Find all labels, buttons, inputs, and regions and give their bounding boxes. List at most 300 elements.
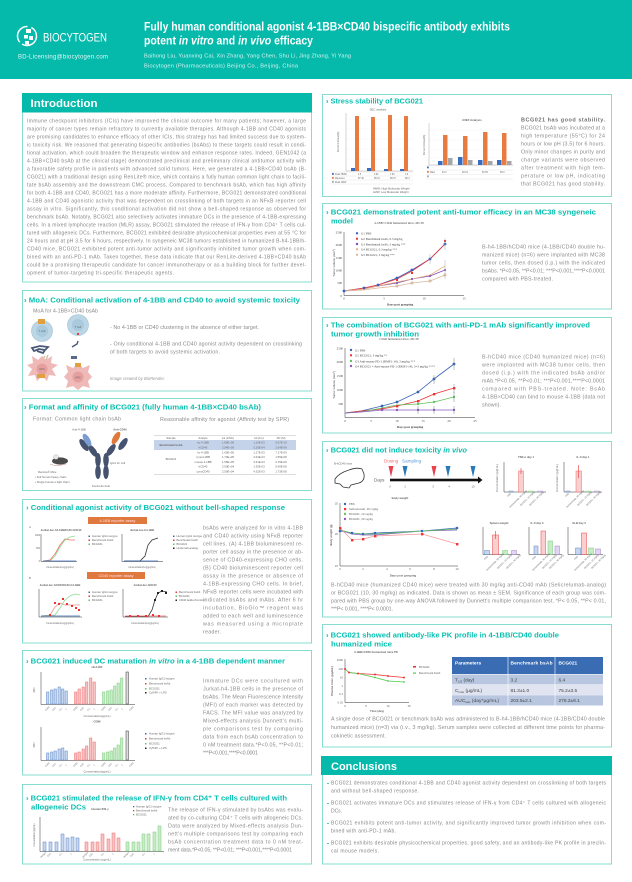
illustration: T cell and APC crosslinking: T cell bbox=[39, 329, 46, 333]
reporter assay description: porter cell assay in the presence or ab- bbox=[203, 550, 303, 556]
line chart: PK: 0 bbox=[344, 704, 346, 708]
reporter assay description: 4-1BB-expressing CHO cells. In brief, bbox=[203, 582, 303, 588]
bar chart: HLA-DR: 1 bbox=[65, 708, 68, 711]
authors and affiliation bbox=[144, 54, 351, 70]
stability description: that BCG021 has good stability. bbox=[521, 182, 605, 188]
line chart: combination tumor volume: 500 bbox=[338, 402, 343, 406]
conclusion bullets: BCG021 activates immature DCs and stimulates release of IFN-γ from CD4⁺ T cells cultured with allogeneic bbox=[331, 801, 606, 807]
chart: CD40 reporter with 4-1BB CHO: Jurkat-luc-hCD40/CHO-h4-1BB bbox=[40, 583, 80, 587]
table: PK parameters: (µg/mL) bbox=[464, 688, 482, 694]
table: affinity by SPR: 5.40E-08 bbox=[275, 464, 287, 468]
line chart: body weight: Selicrelumab, 30 mg/kg bbox=[349, 507, 379, 511]
heading: Introduction: Introduction bbox=[30, 98, 98, 110]
bar chart: CD86: 0.1 bbox=[115, 764, 119, 768]
diagram: antibody format: Anti-4-1BB bbox=[72, 428, 86, 432]
diagram: antibody format bbox=[72, 428, 129, 488]
table: affinity by SPR: Analyte bbox=[198, 436, 208, 440]
table: PK parameters: C bbox=[455, 689, 458, 694]
line chart: MC38 tumor volume: Tumor volume (mm³) bbox=[332, 249, 336, 277]
reporter assay description: reader. bbox=[203, 630, 221, 636]
bar chart: SEC analysis: 98.4 bbox=[405, 178, 410, 180]
bar chart: spleen weight: Spleen weight bbox=[490, 521, 508, 525]
bar chart: SEC analysis: 1.93 bbox=[390, 174, 395, 176]
label: CD40 reporter assay: CD40 reporter assay bbox=[98, 574, 134, 578]
bar chart: HLA-DR: BCG021 bbox=[149, 686, 160, 690]
bar chart: IL-6 day 1: IL-6 day 1 bbox=[577, 455, 590, 459]
table: affinity by SPR: cynoCD40 bbox=[196, 470, 210, 474]
line chart: PK: 5 bbox=[365, 704, 367, 708]
conclusion bullets: BCG021 exhibits potent anti-tumor activity, and significantly improved tumor growth inhibition when com- bbox=[331, 821, 606, 827]
heading: PK profile: humanized mice bbox=[331, 640, 392, 648]
illustration: T cell and APC crosslinking: APC bbox=[75, 376, 81, 380]
line chart: PK: Benchmark bsAb bbox=[419, 671, 441, 675]
bar chart: TNF-α day 1: Concentration (pg/mL) bbox=[495, 464, 499, 492]
combination description bbox=[482, 355, 606, 409]
table: PK parameters: BCG021 bbox=[558, 660, 577, 666]
reporter assay description: (B) CD40 bioluminescent reporter cell bbox=[203, 566, 303, 572]
line chart: body weight: 8 bbox=[433, 567, 435, 571]
bar chart: spleen weight: BCG021, 10 mg/kg bbox=[497, 554, 513, 570]
heading: MoA: › MoA: Conditional activation of 4-1BB and CD40 to avoid systemic toxicity bbox=[24, 296, 301, 305]
combination description: dosed (i.p.) with the indicated bsAb and/or bbox=[482, 371, 605, 377]
bar chart: IL-6 day 1: Concentration (pg/mL) bbox=[555, 464, 559, 492]
panel: introduction bbox=[22, 93, 312, 282]
bar chart: ALB day 3: Selicrelumab, 30 mg/kg bbox=[574, 552, 593, 572]
chart: 4-1BB reporter with CD40 CHO bbox=[35, 528, 118, 569]
chart: CD40 reporter alone: Concentration(Log)(µg/mL) bbox=[131, 622, 159, 625]
bar chart: human IFN-γ: Benchmark bsAb bbox=[136, 808, 158, 812]
bar chart: CD86: 0.1 bbox=[59, 764, 63, 768]
table: affinity by SPR: ka (1/Ms) bbox=[222, 436, 234, 440]
bar chart: CD86: 1 bbox=[121, 764, 124, 767]
illustration: T cell and APC crosslinking: APC bbox=[39, 367, 45, 371]
chart: CD40 reporter alone bbox=[123, 583, 205, 625]
DC maturation description: ***P<0.001,****P<0.0001 bbox=[203, 751, 258, 757]
heading: IFN-γ release: › BCG021 stimulated the release of IFN-γ from CD4⁺ T cells cultured with bbox=[26, 794, 287, 802]
table: affinity by SPR: BCG021 bbox=[166, 457, 177, 461]
bar chart: human IFN-γ: 0.01 bbox=[89, 853, 94, 858]
conclusion bullets: BCG021 exhibits desirable physicochemical properties, good safety, and an antibody-like PK profile in preclin- bbox=[331, 841, 606, 847]
conclusion bullets: and without bell-shaped response. bbox=[331, 789, 419, 795]
dosing schedule diagram: 0 bbox=[389, 484, 391, 488]
bar chart: human IFN-γ: 0.1 bbox=[142, 853, 146, 857]
introduction body text: assay in vitro. Significantly, this conditional activation did not show a bell-shaped response as observed for bbox=[27, 207, 306, 213]
line chart: combination tumor volume: 2000 bbox=[337, 360, 343, 364]
label: 4-1BB reporter assay: 4-1BB reporter assay bbox=[100, 519, 136, 523]
bar chart: CD86: BCG021 bbox=[149, 742, 160, 746]
authors and affiliation: Baihong Liu, Yuanxing Cai, Xin Zhang, Yang Chen, Shu Li, Jing Zhang, Yi Yang bbox=[144, 54, 351, 60]
bar chart: SEC analysis: 98.07 bbox=[390, 178, 396, 180]
DC maturation description: data from each bsAb concentration to bbox=[203, 735, 303, 741]
line chart: combination tumor volume: G2 BCG021, 3 mg/kg ** bbox=[355, 354, 388, 358]
line chart: MC38 tumor volume: G5 BCG021, 3 mg/kg *** bbox=[361, 253, 395, 258]
line chart: MC38 tumor volume: G1 PBS bbox=[361, 232, 372, 236]
panel: conditional agonist activity: A bbox=[29, 525, 31, 529]
chart: 4-1BB reporter with CD40 CHO: Benchmark bsAb bbox=[92, 538, 114, 542]
IFN-γ description: nett's multiple comparisons test by comparing each bbox=[168, 832, 303, 838]
table: affinity by SPR: 5.67E-10 bbox=[275, 440, 287, 444]
table: affinity by SPR: 5.20E-04 bbox=[253, 446, 265, 450]
table: affinity by SPR: hu 4-1BB bbox=[197, 450, 209, 454]
bar chart: iCIEF analysis: 54.3 bbox=[442, 172, 447, 174]
line chart: MC38 tumor volume: 5 bbox=[383, 296, 385, 300]
table: affinity by SPR: 1.10E-03 bbox=[253, 440, 265, 444]
poster title: Fully human conditional agonist 4-1BB×CD40 bispecific antibody exhibits bbox=[144, 20, 510, 34]
bar chart: CD86 bbox=[32, 720, 175, 774]
anti-tumor description: compared with PBS-treated. bbox=[482, 277, 553, 283]
dosing schedule diagram: Dosing bbox=[384, 458, 399, 464]
chart: CD40 reporter alone: Benchmark bsAb bbox=[179, 590, 201, 594]
anti-tumor description: bsAbs. *P<0.05, **P<0.01; ***P<0.001,****P<0.0001 bbox=[482, 269, 605, 275]
toxicity description: pared with PBS group by one-way ANOVA followed by Dunnett's multiple comparison test. *P< 0.05, **P< 0.01, bbox=[331, 599, 606, 605]
line chart: combination tumor volume: G3 Anti-mouse PD-1 (RMP1-14), 3 mg/kg *** bbox=[355, 359, 416, 364]
stability description bbox=[521, 118, 605, 188]
table: affinity by SPR: 1.73E-08 bbox=[275, 470, 287, 474]
bar chart: HLA-DR: 1 bbox=[121, 708, 124, 711]
table: affinity by SPR: 1.80E+06 bbox=[222, 440, 234, 444]
line chart: body weight: 6 bbox=[409, 567, 411, 571]
bar chart: SEC analysis: 95.61 bbox=[374, 178, 380, 180]
panel: conditional agonist activity bbox=[22, 500, 312, 643]
table: PK parameters: Parameters bbox=[455, 660, 481, 666]
table: affinity by SPR: Benchmark bsAb bbox=[159, 443, 183, 447]
bar chart: HLA-DR: Concentration(µg/mL) bbox=[83, 714, 111, 718]
dosing schedule diagram: 1 bbox=[404, 484, 406, 488]
bar chart: CD86: 0.01 bbox=[80, 763, 85, 768]
line chart: combination tumor volume: Days post grouping bbox=[397, 425, 424, 429]
reporter assay description: and CD40 activity using NFκB reporter bbox=[203, 534, 303, 540]
toxicity description: B-hCD40 mice (humanized CD40 mice) were treated with 30 mg/kg anti-CD40 mAb (Selicrelumab-analog) bbox=[331, 583, 606, 589]
DC maturation description: Immature DCs were cocultured with bbox=[203, 679, 303, 685]
panel: DC maturation bbox=[22, 650, 312, 775]
bar chart: TNF-α day 1 bbox=[495, 455, 546, 509]
bar chart: SEC analysis: 1.6 bbox=[405, 174, 409, 176]
bar chart: HLA-DR: 0.001 bbox=[45, 706, 51, 712]
introduction body text: 4-1BB×CD40 bsAb at the clinical stage) demonstrated preclinical and preliminary clinical antitumor activity with bbox=[27, 159, 306, 165]
chart: 4-1BB reporter with CD40 CHO: BCG021 bbox=[92, 542, 103, 546]
reporter assay description: sence of CD40-expressing CHO cells. bbox=[203, 558, 303, 564]
heading: anti-tumor efficacy: model bbox=[331, 216, 353, 226]
chart: CD40 reporter with 4-1BB CHO: BCG021 bbox=[92, 598, 103, 602]
authors and affiliation: Biocytogen (Pharmaceuticals) Beijing Co., Beijing, China bbox=[144, 64, 299, 70]
stability description: perature or low pH, indicating bbox=[521, 174, 605, 180]
line chart: body weight: Body weight bbox=[392, 496, 408, 500]
line chart: PK: 0.01 bbox=[338, 700, 343, 704]
chart: 4-1BB reporter with CD40 CHO: 1000 bbox=[35, 535, 41, 537]
icon: RenLite mouse bbox=[35, 455, 70, 484]
dosing schedule diagram: 3 bbox=[432, 484, 434, 488]
chart: 4-1BB reporter alone: Human IgG1 isotype bbox=[176, 534, 202, 538]
chart: 4-1BB reporter with CD40 CHO: Human IgG1 isotype bbox=[92, 534, 118, 538]
DC maturation description: Mixed-effects analysis Dunnett's multi- bbox=[203, 719, 303, 725]
bar chart: spleen weight: PBS bbox=[484, 556, 489, 561]
bar chart: TNF-α day 1: BCG021, 30 mg/kg bbox=[529, 491, 545, 507]
introduction body text: 4-1BB and CD40 agonistic activity that was dependent on crosslinking of both targets in an NFκB reporter cell bbox=[27, 199, 306, 205]
bar chart: human IFN-γ: Isotype bbox=[40, 851, 47, 859]
bar chart: IL-6 day 1 bbox=[555, 455, 602, 509]
subheading: format: Format: Common light chain bsAb bbox=[33, 416, 121, 422]
dosing schedule diagram bbox=[334, 458, 482, 488]
dosing schedule diagram: Sampling bbox=[402, 458, 422, 464]
DC maturation description: FACS. The MFI value was analyzed by bbox=[203, 711, 303, 717]
PK description: cokinetic assessment. bbox=[331, 734, 386, 740]
line chart: body weight: Body weight (g) bbox=[329, 524, 333, 545]
toxicity description: or BCG021 (10, 30 mg/kg) as indicated. Data is shown as mean ± SEM. Significance of each group was com- bbox=[331, 591, 606, 597]
stability description: high temperature (55°C) for 24 bbox=[521, 134, 605, 140]
panel: conclusions bbox=[321, 756, 612, 864]
bar chart: IL-6 day 1: BCG021, 10 mg/kg bbox=[577, 491, 593, 507]
reporter assay description: added to each well and luminescence bbox=[203, 614, 303, 620]
combination description: shown). bbox=[482, 403, 501, 409]
bar chart: HLA-DR: Benchmark bsAb bbox=[149, 682, 171, 686]
line chart: body weight: BCG021, 10 mg/kg bbox=[349, 512, 373, 516]
heading: PK profile: › BCG021 showed antibody-like PK profile in 4-1BB/CD40 double bbox=[326, 630, 559, 640]
DC maturation description: 0 nM treatment data.*P<0.05, **P<0.01; bbox=[203, 743, 303, 749]
combination description: compared with PBS-treated. Note: BsAb bbox=[482, 387, 605, 393]
bar chart: CD86: 1 bbox=[93, 764, 96, 767]
line chart: body weight: 2 bbox=[362, 567, 364, 571]
line chart: combination tumor volume: 20 bbox=[447, 419, 451, 423]
table: PK parameters: 203.5±2.1 bbox=[510, 698, 532, 704]
bar chart: human IFN-γ: Human IgG1 isotype bbox=[136, 804, 162, 808]
chart: 4-1BB reporter alone bbox=[122, 528, 202, 569]
bar chart: HLA-DR bbox=[32, 665, 175, 718]
bar chart: HLA-DR: 0.01 bbox=[108, 707, 113, 712]
line chart: body weight: BCG021, 30 mg/kg bbox=[349, 517, 373, 521]
bar chart: human IFN-γ: Isotype bbox=[82, 851, 89, 859]
bar chart: SEC analysis: 3.62 bbox=[374, 174, 379, 176]
line chart: MC38 tumor volume: G4 BCG021, 0.3 mg/kg *** bbox=[361, 248, 398, 253]
bar chart: CD86: 0.001 bbox=[45, 762, 51, 768]
line chart: body weight: 20 bbox=[335, 532, 338, 536]
table: affinity by SPR: 2.15E-09 bbox=[275, 460, 287, 464]
heading: toxicity: › BCG021 did not induce toxicity in vivo bbox=[326, 446, 467, 454]
stability description: BCG021 has good stability. bbox=[521, 118, 605, 124]
bar chart: HLA-DR: Cy5/FK + LPS bbox=[149, 690, 167, 694]
bar chart: iCIEF analysis: Percent Area(%) bbox=[422, 135, 426, 155]
heading: PK profile bbox=[326, 630, 559, 648]
chart: 4-1BB reporter with CD40 CHO: 0 bbox=[39, 561, 41, 563]
anti-tumor description: B-h4-1BB/hCD40 mice (4-1BB/CD40 double hu- bbox=[482, 245, 605, 251]
bar chart: SEC analysis: Peak LMW bbox=[335, 182, 347, 184]
introduction body text: bined with an anti-PD-1 mAb. Taken together, these data indicate that our RenLite-derived 4-1BB×CD40 bsAb bbox=[27, 255, 306, 261]
line chart: PK: 0.1 bbox=[339, 692, 343, 696]
table: affinity by SPR bbox=[154, 436, 296, 474]
table: affinity by SPR: 2.50E+04 bbox=[222, 464, 234, 468]
line chart: MC38 tumor volume: 2500 bbox=[336, 230, 342, 234]
reporter assay description: was measured using a microplate bbox=[203, 622, 303, 628]
bar chart: SEC analysis: HMW: High Molecular Weight bbox=[373, 186, 410, 190]
table: PK parameters: (day) bbox=[462, 678, 475, 684]
table: PK parameters: 278.2±8.1 bbox=[558, 698, 580, 704]
chart: CD40 reporter with 4-1BB CHO: Human IgG1 isotype bbox=[92, 590, 118, 594]
bar chart: SEC analysis: Percent Area(%) bbox=[336, 132, 340, 152]
bar chart: CD86: Concentration(µg/mL) bbox=[83, 770, 111, 774]
heading: DC maturation: › BCG021 induced DC maturation in vitro in a 4-1BB dependent manner bbox=[26, 656, 285, 666]
bar chart: SEC analysis: LMW: Low Molecular Weight bbox=[373, 190, 409, 194]
anti-tumor description: manized mice) (n=6) were implanted with MC38 bbox=[482, 253, 605, 259]
bar chart: human IFN-γ: Concentration (pg/mL) bbox=[33, 823, 36, 846]
bar chart: IL-6 day 1: Selicrelumab, 30 mg/kg bbox=[566, 489, 585, 509]
line chart: PK: Time (day) bbox=[370, 709, 384, 713]
bar chart: CD86: Human IgG1 isotype bbox=[149, 732, 175, 736]
heading: combination bbox=[326, 320, 590, 338]
anti-tumor description bbox=[482, 245, 605, 283]
bar chart: HLA-DR: HLA-DR bbox=[92, 665, 102, 669]
table: affinity by SPR: KD (M) bbox=[277, 436, 285, 440]
MoA bullet text: - No 4-1BB or CD40 clustering in the absence of either target. bbox=[110, 325, 259, 331]
bar chart: human IFN-γ: Human IFN-γ bbox=[91, 807, 109, 811]
reporter assay description: cell lines. (A) 4-1BB bioluminescent re- bbox=[203, 542, 303, 548]
table: affinity by SPR: 7.17E-09 bbox=[275, 450, 287, 454]
line chart: body weight: 10 bbox=[455, 567, 459, 571]
table: affinity by SPR: Sample bbox=[166, 436, 176, 440]
line chart: PK: 4-1BB×CD40 humanized mice PK bbox=[354, 650, 398, 654]
bar chart: CD86: CD86 bbox=[93, 720, 101, 724]
panel: conditional agonist activity: B bbox=[29, 576, 31, 580]
illustration: T cell and APC crosslinking bbox=[27, 314, 92, 390]
toxicity description: ***P< 0.001, ****P< 0.0001. bbox=[331, 607, 393, 613]
IFN-γ description: The release of IFN-γ stimulated by bsAbs was evalu- bbox=[168, 808, 303, 814]
table: affinity by SPR: 4.32E-03 bbox=[253, 470, 265, 474]
bar chart: ALB day 3: BCG021, 10 mg/kg bbox=[584, 554, 600, 570]
IFN-γ description: ated by co-culturing CD4⁺ T cells with allogeneic DCs. bbox=[168, 816, 303, 822]
introduction body text: tate bsAb assembly and the downstream CMC process. Compared to benchmark bsAb, which has high affinity bbox=[27, 183, 307, 189]
caption: MoA for bsAb: MoA for 4-1BB×CD40 bsAb bbox=[33, 308, 98, 314]
icon: RenLite mouse: RenLite® Mice bbox=[38, 470, 57, 474]
line chart: combination tumor volume: G1 PBS bbox=[355, 348, 366, 352]
table: affinity by SPR: cyno4-1BB bbox=[196, 455, 210, 459]
bar chart: HLA-DR: 0.01 bbox=[80, 707, 85, 712]
table: affinity by SPR: hCD40 bbox=[199, 464, 208, 468]
chart: CD40 reporter with 4-1BB CHO: Concentration(Log)(µg/mL) bbox=[46, 622, 74, 625]
table: affinity by SPR: 1.55E-08 bbox=[275, 455, 287, 459]
table: affinity by SPR: 1.35E-03 bbox=[253, 464, 265, 468]
bar chart: human IFN-γ: 1 bbox=[153, 853, 156, 856]
bar chart: CD86: Benchmark bsAb bbox=[149, 736, 171, 740]
introduction body text: majority of cancer types remain refractory to currently available therapies. Although 4-1BB and CD40 agonists bbox=[27, 127, 306, 133]
bar chart: ALB day 3: PBS bbox=[574, 556, 579, 561]
heading: stress stability: › Stress stability of BCG021 bbox=[326, 96, 424, 106]
bar chart: human IFN-γ: BCG021 bbox=[136, 812, 147, 816]
reporter assay description: bsAbs were analyzed for in vitro 4-1BB bbox=[203, 526, 303, 532]
DC maturation description: Jurkat-h4-1BB cells in the presence of bbox=[203, 687, 304, 693]
DC maturation description: (MFI) of each marker was detected by bbox=[203, 703, 303, 709]
panel: mechanism of action bbox=[22, 290, 312, 391]
bar chart: TNF-α day 1: Selicrelumab, 30 mg/kg bbox=[509, 489, 528, 509]
bar chart: CD86: 0.001 bbox=[101, 762, 107, 768]
table: affinity by SPR: 2.50E+04 bbox=[222, 470, 234, 474]
toxicity description bbox=[331, 583, 606, 613]
bar chart: spleen weight: Selicrelumab, 30 mg/kg bbox=[486, 552, 505, 572]
bar chart: CD86: 0.01 bbox=[108, 763, 113, 768]
bar chart: iCIEF analysis: iCIEF Analysis bbox=[462, 118, 482, 122]
panel: stress stability bbox=[322, 94, 612, 196]
bar chart: human IFN-γ: 0.01 bbox=[47, 853, 52, 858]
line chart: MC38 tumor volume: G2 Benchmark bsAb, 0.3 mg/kg bbox=[361, 237, 403, 242]
bar chart: SEC analysis: 97.40 bbox=[358, 178, 364, 180]
bar chart: HLA-DR: MFI bbox=[32, 687, 36, 692]
PK description: A single dose of BCG021 or benchmark bsAb was administered to B-h4-1BB/hCD40 mice (4-1BB/CD40 double bbox=[331, 717, 605, 723]
table: PK parameters: T bbox=[455, 678, 458, 684]
bar chart: CD86: MFI bbox=[32, 742, 36, 747]
line chart: body weight: 15 bbox=[335, 564, 338, 568]
dosing schedule diagram: Days bbox=[374, 478, 385, 482]
bar chart: CD86: 0.01 bbox=[52, 763, 57, 768]
line chart: PK: 10 bbox=[340, 676, 343, 680]
table: affinity by SPR: mouse 4-1BB bbox=[195, 460, 212, 464]
DC maturation description: ple comparisons test by comparing bbox=[203, 727, 303, 733]
line chart: body weight: 0 bbox=[339, 567, 341, 571]
bar chart: human IFN-γ: 0.1 bbox=[59, 853, 63, 857]
bar chart: IL-6 day 3: BCG021, 10 mg/kg bbox=[542, 554, 558, 570]
bar chart: CD86: 1 bbox=[65, 764, 68, 767]
bar chart: IL-6 day 1: BCG021, 30 mg/kg bbox=[586, 491, 602, 507]
reporter assay description: NFκB reporter cells were incubated with bbox=[203, 590, 303, 596]
introduction body text: for both 4-1BB and CD40, BCG021 has a more moderate affinity. Furthermore, BCG021 demonstrated conditional bbox=[27, 191, 306, 197]
line chart: MC38 tumor volume: 10 bbox=[422, 296, 426, 300]
bar chart: human IFN-γ: 1 bbox=[112, 853, 115, 856]
bar chart: spleen weight bbox=[483, 521, 522, 572]
bar chart: human IFN-γ: 1 bbox=[70, 853, 73, 856]
panel: format and affinity bbox=[22, 398, 312, 490]
table: affinity by SPR: 1.70E+05 bbox=[222, 455, 234, 459]
line chart: PK: Plasma Conc. (µg/mL) bbox=[330, 666, 334, 696]
table: affinity by SPR: 2.64E-03 bbox=[253, 455, 265, 459]
introduction body text bbox=[27, 119, 307, 277]
bar chart: SEC analysis: SEC analysis bbox=[370, 108, 387, 112]
introduction body text: 24 hours and at pH 3.5 for 6 hours, respectively. In syngeneic MC38 tumors established in humanized B-h4-1BB/h- bbox=[27, 239, 306, 245]
chart: 4-1BB reporter with CD40 CHO: Concentration(Log)(µg/mL) bbox=[46, 566, 74, 569]
line chart: combination tumor volume: 0 bbox=[344, 419, 346, 423]
table: affinity by SPR: hCD40 bbox=[199, 446, 208, 450]
anti-tumor description: tumor cells, then dosed (i.p.) with the indicated bbox=[482, 261, 605, 267]
line chart: MC38 tumor volume: 4-1BB×CD40 humanized mice, MC38 bbox=[374, 221, 424, 226]
line chart: combination tumor volume: 1500 bbox=[337, 374, 343, 378]
line chart: MC38 tumor volume: Days post grouping bbox=[387, 302, 414, 306]
introduction body text: opment of tumor-targeting tri-specific therapeutic agents. bbox=[27, 271, 174, 277]
line chart: combination tumor volume: 1000 bbox=[337, 388, 343, 392]
bar chart: iCIEF analysis: 59.0 bbox=[500, 172, 505, 174]
bar chart: CD86: 0.1 bbox=[87, 764, 91, 768]
line chart: combination tumor volume: 2500 bbox=[337, 346, 343, 350]
table: affinity by SPR: 2.04E-09 bbox=[275, 446, 287, 450]
combination description: B-hCD40 mice (CD40 humanized mice) (n=6) bbox=[482, 355, 605, 361]
combination description: 4-1BB×CD40 can bind to mouse 4-1BB (data not bbox=[482, 395, 606, 401]
PK description bbox=[331, 717, 605, 740]
diagram: antibody format: Knob-into-hole bbox=[92, 484, 111, 488]
poster title bbox=[144, 20, 510, 48]
line chart: combination tumor volume: Tumor volume (mm³) bbox=[332, 371, 336, 399]
stability description: Only minor changes in purity and bbox=[521, 150, 605, 156]
IFN-γ description: ment data.*P<0.05, **P<0.01; ***P<0.001,****P<0.0001 bbox=[168, 848, 292, 854]
panel: PK profile bbox=[322, 624, 612, 747]
bar chart: ALB day 3: BCG021, 30 mg/kg bbox=[591, 554, 607, 570]
bar chart: human IFN-γ: 0.1 bbox=[101, 853, 105, 857]
dosing schedule diagram: B-hCD40 mice bbox=[334, 462, 353, 466]
introduction body text: tional activation, which could broaden the therapeutic window and enhance response rates. Indeed, GEN1042 (a bbox=[27, 151, 306, 157]
chart: CD40 reporter alone: CD40 ladder/Control bbox=[179, 598, 205, 602]
chart: 4-1BB reporter with CD40 CHO: Jurkat-luc-h4-1BB/CHO-hCD40 bbox=[41, 528, 82, 532]
poster title: potent in vitro and in vivo efficacy bbox=[144, 34, 313, 48]
introduction body text: could be a promising therapeutic candidate for cancer immunotherapy or as a building block for further devel- bbox=[27, 263, 306, 269]
line chart: MC38 tumor volume: 15 bbox=[462, 296, 466, 300]
table: PK parameters: Benchmark bsAb bbox=[510, 660, 553, 666]
heading: anti-tumor efficacy bbox=[326, 208, 596, 226]
table: PK parameters: 81.3±1.0 bbox=[510, 688, 529, 694]
chart: 4-1BB reporter with CD40 CHO: 500 bbox=[36, 548, 41, 550]
table: affinity by SPR: 1.60E+05 bbox=[222, 450, 234, 454]
